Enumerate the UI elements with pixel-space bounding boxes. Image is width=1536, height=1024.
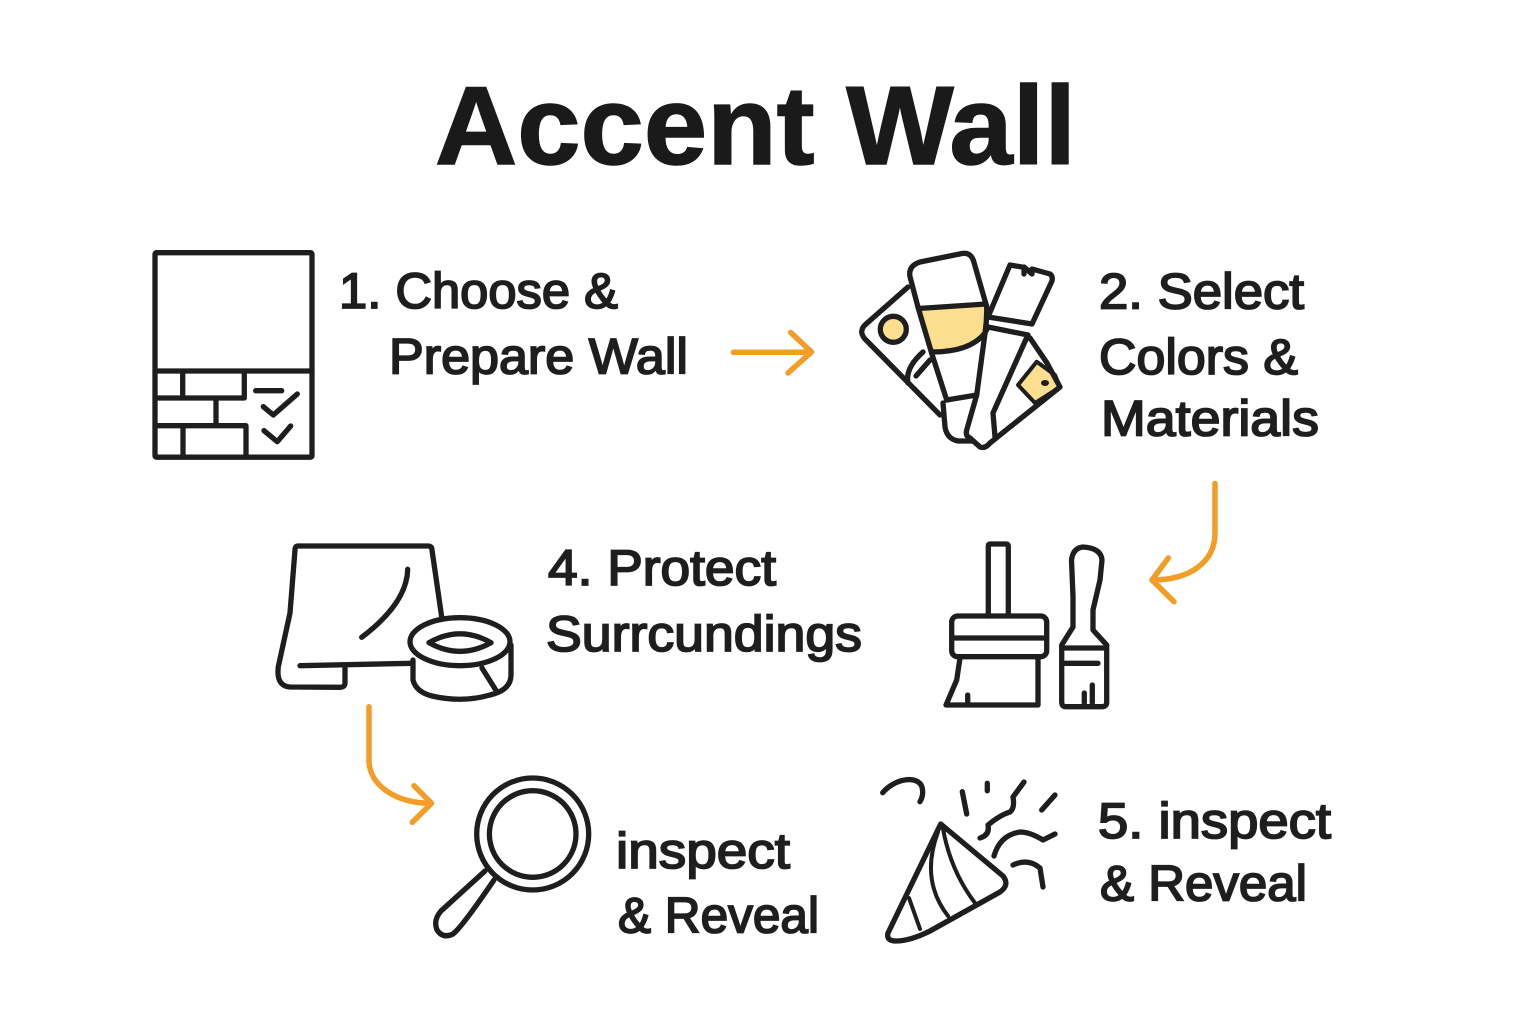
arrow: step 4 to magnifier [369,707,432,822]
icon: paint swatches and brush [862,253,1060,448]
step 2 label: Materials [1101,390,1319,446]
step 1 label: Prepare Wall [389,328,688,384]
step 2 label: Colors & [1099,329,1298,385]
step 4 label: Surrcundings [546,606,862,662]
step 1 label: 1. Choose & [339,263,618,319]
yellow tag [1018,362,1060,403]
title: Accent Wall [435,64,1076,188]
inspect label [616,823,819,944]
step 5 label: & Reveal [1100,856,1307,912]
icon: paint brushes [946,544,1107,707]
step 4 label: 4. Protect [548,540,776,596]
icon: wall with bricks and checklist [155,253,312,457]
step 4 label [546,540,862,662]
step 5 label [1098,793,1331,912]
icon: party popper cone with confetti [883,780,1055,941]
arrow: step 1 to step 2 [734,332,812,373]
arrow: step 2 to brushes [1152,484,1215,602]
step 1 label [339,263,688,384]
step 2 label: 2. Select [1099,264,1304,320]
inspect label: inspect [616,823,790,879]
step 2 label [1099,264,1319,446]
icon: drop cloth and tape roll [278,546,511,699]
step 5 label: 5. inspect [1098,793,1331,849]
swatch outlines [862,253,1060,448]
yellow band [920,304,985,352]
icon: magnifying glass [436,778,589,936]
tag hole [1041,380,1049,386]
inspect label: & Reveal [618,888,819,944]
